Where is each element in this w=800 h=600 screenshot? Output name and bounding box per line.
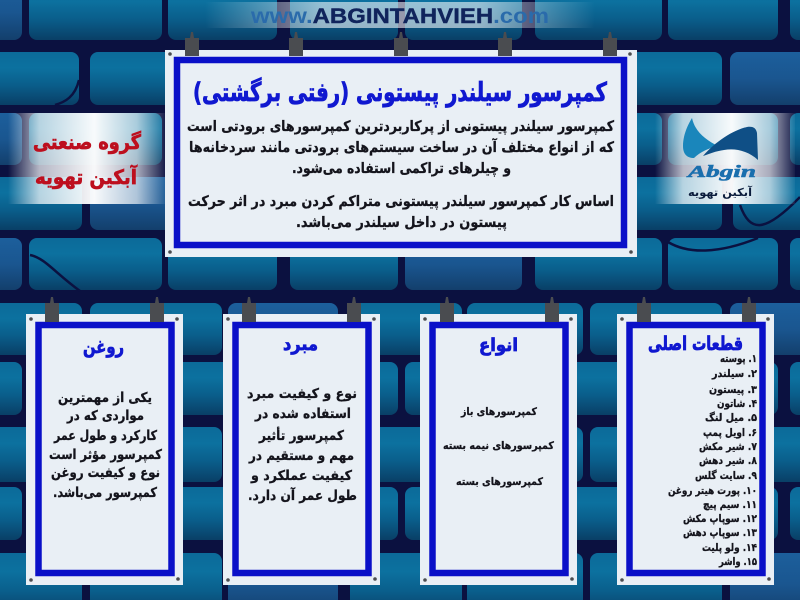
list: main parts: ۱۱. سیم پیچ (703, 499, 757, 511)
text block: refrigerant description: کیفیت عملکرد و (250, 468, 352, 484)
list: main parts: ۵. میل لنگ (705, 411, 758, 424)
list: main parts: ۳. پیستون (709, 384, 758, 396)
list: main parts: ۱۳. سوپاپ دهش (683, 527, 757, 539)
panel: oil (26, 297, 183, 585)
text block: working principle: پیستون در داخل سیلندر می‌باشد. (296, 215, 507, 231)
text block: compressor types: کمپرسورهای بسته (456, 476, 544, 488)
text block: compressor types (443, 406, 555, 488)
heading: main parts: قطعات اصلی (648, 333, 743, 355)
text block: refrigerant description: کمپرسور تأثیر (258, 427, 344, 444)
text block: oil description: یکی از مهمترین (58, 390, 152, 406)
sign: company name: آبکین تهویه (35, 164, 138, 189)
text block: refrigerant description: طول عمر آن دارد. (248, 487, 357, 504)
sign: company name (8, 113, 165, 204)
panel: types (420, 297, 577, 585)
heading: types: انواع (479, 335, 518, 356)
list: main parts: ۱۴. ولو پلیت (702, 542, 757, 554)
panel: main parts (617, 297, 774, 585)
text block: oil description: کارکرد و طول عمر (53, 428, 157, 444)
list: main parts: ۲. سیلندر (711, 368, 758, 380)
list: main parts: ۴. شاتون (717, 398, 757, 410)
text block: compressor types: کمپرسورهای نیمه بسته (443, 440, 555, 452)
text block: oil description (49, 390, 162, 501)
list: main parts: ۱۵. واشر (718, 556, 757, 568)
heading: refrigerant: مبرد (283, 334, 318, 355)
text block: refrigerant description: استفاده شده در (254, 406, 351, 422)
text block: intro paragraph (187, 119, 614, 177)
list: main parts: ۸. شیر دهش (699, 455, 758, 467)
logo: Abgin: آبکین تهویه (688, 185, 752, 199)
text block: working principle: اساس کار کمپرسور سیلندر پیستونی متراکم کردن مبرد در اثر حرکت (188, 194, 614, 210)
list: main parts (668, 353, 758, 568)
text block: oil description: کمپرسور می‌باشد. (53, 485, 157, 501)
website address (205, 2, 595, 28)
text block: refrigerant description (247, 386, 357, 504)
list: main parts: ۱۰. پورت هیتر روغن (668, 485, 757, 497)
panel: main description (165, 32, 637, 257)
heading: main title: کمپرسور سیلندر پیستونی (رفتی برگشتی) (193, 77, 608, 108)
text block: refrigerant description: مهم و مستقیم در (248, 448, 354, 464)
panel: refrigerant (223, 297, 380, 585)
text block: oil description: کمپرسور مؤثر است (49, 447, 162, 463)
list: main parts: ۶. اویل پمپ (703, 427, 757, 439)
text block: intro paragraph: و چیلرهای تراکمی استفاده می‌شود. (292, 161, 511, 177)
text block: oil description: مواردی که در (66, 408, 144, 424)
sign: company name: گروه صنعتی (33, 130, 141, 154)
website address: www. ABGINTAHVIEH .com (250, 5, 549, 28)
text block: oil description: نوع و کیفیت روغن (51, 465, 160, 481)
text block: compressor types: کمپرسورهای باز (460, 406, 538, 418)
logo: Abgin: Abgin (686, 162, 756, 181)
text block: intro paragraph: که از انواع مختلف آن در ساخت سیستم‌های برودتی مانند سردخانه‌ها (189, 138, 614, 156)
logo: Abgin (655, 113, 795, 204)
list: main parts: ۱. پوسته (720, 353, 757, 365)
list: main parts: ۹. سایت گلس (695, 469, 757, 482)
text block: working principle (188, 194, 614, 231)
heading: oil: روغن (83, 337, 124, 358)
text block: refrigerant description: نوع و کیفیت مبرد (247, 386, 357, 402)
list: main parts: ۱۲. سوپاپ مکش (683, 513, 757, 525)
list: main parts: ۷. شیر مکش (699, 441, 758, 453)
text block: intro paragraph: کمپرسور سیلندر پیستونی از پرکاربردترین کمپرسورهای برودتی است (187, 119, 614, 135)
